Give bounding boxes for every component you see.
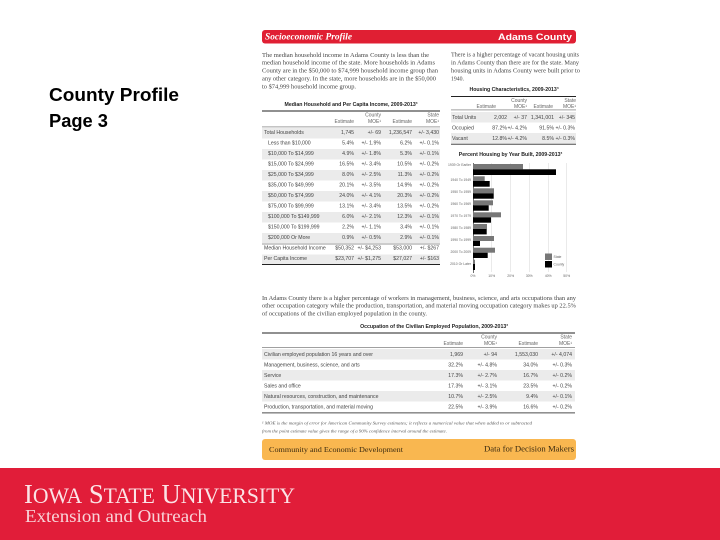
income table: +/- $267 [420, 246, 439, 252]
income table: $100,000 To $149,999 [268, 214, 320, 220]
bar chart: housing by year built: 1940 To 1949 [450, 178, 471, 182]
footnote: ¹ MOE is the margin of error for American Community Survey estimates; it reflects a numerical value that when added to or subtracted [262, 420, 533, 426]
chart legend [545, 254, 565, 268]
bar chart: housing by year built: 30% [526, 274, 533, 278]
occupation paragraph: of occupations of the civilian employed population in the county. [262, 310, 427, 318]
income table: 13.1% [339, 204, 354, 210]
housing characteristics table: +/- 4.2% [508, 126, 527, 132]
income table: 0.9% [342, 235, 354, 241]
housing table title: Housing Characteristics, 2009-2013³ [469, 87, 559, 93]
chart legend: State [554, 255, 562, 259]
income table: +/- 0.1% [420, 224, 439, 230]
slide title: County Profile [49, 85, 179, 105]
bar chart: housing by year built: 1990 To 1999 [450, 238, 471, 242]
income table: +/- 2.5% [362, 172, 381, 178]
occupation table: +/- 0.1% [553, 394, 572, 400]
occupation table: 17.3% [448, 384, 463, 390]
income table: 14.9% [397, 182, 412, 188]
income table: +/- 0.2% [420, 204, 439, 210]
income paragraph: The median household income in Adams County is less than the [262, 52, 429, 59]
occupation table: +/- 2.7% [478, 373, 497, 379]
occupation table: Management, business, science, and arts [264, 362, 360, 368]
occupation table: Natural resources, construction, and maintenance [264, 394, 379, 400]
income paragraph: any other category. In the state, more households are in the $50,000 [262, 76, 437, 82]
income table: 8.0% [342, 172, 354, 178]
income table: +/- $1,275 [357, 256, 381, 262]
bar chart: housing by year built: 40% [545, 274, 552, 278]
income table: 6.2% [400, 140, 412, 146]
income table: $50,000 To $74,999 [268, 193, 314, 199]
bar chart: housing by year built: 1970 To 1979 [450, 214, 471, 218]
footnote: from the point estimate value gives the range of a 90% confidence interval around the estimate. [262, 428, 447, 434]
income table: State [427, 112, 439, 118]
bar chart: housing by year built: 1980 To 1989 [450, 226, 471, 230]
income table: 2.2% [342, 224, 354, 230]
occupation table: 22.5% [448, 404, 463, 410]
occupation table: +/- 3.1% [478, 384, 497, 390]
housing characteristics table: +/- 0.3% [556, 136, 575, 142]
housing characteristics table: State [564, 98, 576, 104]
income paragraph: to $74,999 household income group. [262, 84, 356, 90]
income table: +/- 3.4% [362, 162, 381, 168]
housing characteristics table: MOE¹ [514, 104, 527, 110]
income table: Estimate [393, 119, 412, 125]
income table: 10.5% [397, 162, 412, 168]
income table: 2.9% [400, 235, 412, 241]
housing characteristics table: County [511, 98, 527, 104]
housing characteristics table: +/- 345 [559, 115, 575, 121]
income table: 11.3% [398, 172, 412, 178]
income table: +/- 0.5% [362, 235, 381, 241]
income table: $150,000 To $199,999 [268, 224, 320, 230]
occupation table: MOE¹ [484, 341, 497, 347]
occupation table: +/- 94 [484, 352, 497, 358]
housing characteristics table: Occupied [452, 126, 474, 132]
income paragraph: County are in the $50,000 to $74,999 household income group than [262, 68, 439, 74]
occupation table: +/- 4.8% [478, 362, 497, 368]
orange footer banner: Data for Decision Makers [484, 444, 574, 454]
income table: 4.9% [342, 151, 354, 157]
slide title [49, 85, 179, 131]
footnote [262, 420, 533, 434]
housing characteristics table: 91.5% [539, 126, 554, 132]
housing characteristics table: 2,002 [494, 115, 507, 121]
income table: 1,236,547 [389, 130, 412, 136]
occupation table: +/- 4,074 [551, 352, 572, 358]
occupation table: +/- 0.2% [553, 373, 572, 379]
income table: $15,000 To $24,999 [268, 162, 314, 168]
income table [262, 102, 440, 265]
housing characteristics table: Estimate [477, 104, 496, 110]
occupation table: +/- 0.3% [553, 362, 572, 368]
income table: +/- 69 [368, 130, 381, 136]
slide title: Page 3 [49, 111, 108, 131]
bar chart: housing by year built: 2010 Or Later [450, 262, 472, 266]
occupation table: State [560, 334, 572, 340]
occupation table: 1,969 [450, 352, 463, 358]
university wordmark: IOWA STATE UNIVERSITY [24, 479, 295, 509]
housing characteristics table: MOE¹ [563, 104, 576, 110]
income table: +/- $4,253 [357, 246, 381, 252]
profile header banner [262, 30, 576, 44]
income table: +/- 0.2% [420, 172, 439, 178]
housing paragraph: There is a higher percentage of vacant housing units [451, 52, 579, 58]
housing characteristics table: Vacant [452, 136, 468, 142]
occupation table: 34.0% [523, 362, 538, 368]
income table: Total Households [264, 130, 304, 136]
income table: +/- 2.1% [362, 214, 381, 220]
occupation table: 23.5% [523, 384, 538, 390]
income table: Estimate [335, 119, 354, 125]
income paragraph [262, 52, 439, 90]
housing characteristics table: Total Units [452, 115, 477, 121]
income table: +/- 1.1% [362, 224, 381, 230]
occupation table: Sales and office [264, 384, 301, 390]
income table: +/- 3.4% [362, 204, 381, 210]
occupation table: 9.4% [526, 394, 538, 400]
income table: 6.0% [342, 214, 354, 220]
income table: Median Household Income [264, 246, 326, 252]
income table: $50,352 [335, 246, 354, 252]
income table: +/- 0.1% [420, 214, 439, 220]
occupation table: 16.7% [523, 373, 538, 379]
income table: +/- 0.2% [420, 162, 439, 168]
income table: MOE¹ [426, 119, 439, 125]
housing paragraph: 1940. [451, 76, 464, 82]
red university footer [0, 468, 720, 540]
income table: 5.4% [342, 140, 354, 146]
housing characteristics table: +/- 37 [514, 115, 527, 121]
occupation table: +/- 0.2% [553, 384, 572, 390]
occupation table: +/- 0.2% [553, 404, 572, 410]
income table: 24.0% [339, 193, 354, 199]
income table: $35,000 To $49,999 [268, 182, 314, 188]
occupation table: Service [264, 373, 281, 379]
income table: 20.3% [397, 193, 412, 199]
income table: 13.5% [397, 204, 412, 210]
income table: $200,000 Or More [268, 235, 310, 241]
income table: +/- 3,430 [418, 130, 439, 136]
housing characteristics table: 12.8% [492, 136, 507, 142]
occupation table: 10.7% [448, 394, 463, 400]
income table: $53,000 [393, 246, 412, 252]
occupation table: +/- 3.9% [478, 404, 497, 410]
bar chart: housing by year built [448, 152, 570, 278]
bar chart: housing by year built: 1960 To 1969 [450, 202, 471, 206]
bar chart: housing by year built: 1939 Or Earlier [448, 163, 472, 167]
income table: $10,000 To $14,999 [268, 151, 314, 157]
income table title: Median Household and Per Capita Income, 2009-2013³ [285, 102, 418, 108]
occupation table title: Occupation of the Civilian Employed Population, 2009-2013³ [360, 324, 508, 330]
profile header banner: Adams County [498, 32, 573, 43]
occupation table: County [481, 334, 497, 340]
bar chart: housing by year built: 10% [488, 274, 495, 278]
occupation table: +/- 2.5% [478, 394, 497, 400]
income table: 12.3% [397, 214, 412, 220]
income table: +/- 0.1% [420, 151, 439, 157]
extension and outreach: Extension and Outreach [25, 506, 207, 526]
income table: +/- 0.2% [420, 182, 439, 188]
housing paragraph: in Adams County than there are for the state. Many [451, 60, 580, 66]
housing paragraph: housing units in Adams County were built prior to [451, 68, 581, 74]
income table: +/- 0.2% [420, 193, 439, 199]
housing characteristics table: +/- 0.3% [556, 126, 575, 132]
housing characteristics table [451, 87, 576, 145]
income table: +/- 3.5% [362, 182, 381, 188]
occupation table: MOE¹ [559, 341, 572, 347]
occupation table: 32.2% [448, 362, 463, 368]
income table: $75,000 To $99,999 [268, 204, 314, 210]
housing characteristics table: +/- 4.2% [508, 136, 527, 142]
income table: +/- 0.1% [420, 235, 439, 241]
income table: Less than $10,000 [268, 140, 311, 146]
chart legend: County [554, 262, 565, 266]
housing characteristics table: 1,341,001 [531, 115, 554, 121]
income table: County [365, 112, 381, 118]
profile header banner: Socioeconomic Profile [265, 32, 352, 42]
income table: 16.5% [339, 162, 354, 168]
bar chart: housing by year built: 1950 To 1959 [450, 190, 471, 194]
orange footer banner [262, 439, 576, 460]
housing paragraph [451, 52, 581, 82]
occupation table: 1,553,030 [515, 352, 538, 358]
income table: 5.3% [400, 151, 412, 157]
income table: +/- 1.8% [362, 151, 381, 157]
chart title: Percent Housing by Year Built, 2009-2013³ [459, 152, 562, 158]
income table: 1,745 [341, 130, 354, 136]
bar chart: housing by year built: 20% [507, 274, 514, 278]
occupation paragraph: other occupation category while the production, transportation, and material moving occupation category makes up 22.5% [262, 302, 576, 310]
income table: 3.4% [400, 224, 412, 230]
income table: $23,707 [335, 256, 354, 262]
occupation table: Estimate [444, 341, 463, 347]
income table: 20.1% [339, 182, 354, 188]
occupation paragraph [262, 295, 577, 318]
occupation table: Production, transportation, and material moving [264, 404, 373, 410]
bar chart: housing by year built: 0% [471, 274, 475, 278]
income table: $25,000 To $34,999 [268, 172, 314, 178]
income table: $27,027 [393, 256, 412, 262]
income table: +/- 0.1% [420, 140, 439, 146]
occupation table: Estimate [519, 341, 538, 347]
income table: +/- 4.1% [362, 193, 381, 199]
housing characteristics table: Estimate [534, 104, 553, 110]
housing characteristics table: 87.2% [492, 126, 507, 132]
income table: +/- $163 [420, 256, 439, 262]
income table: +/- 1.9% [362, 140, 381, 146]
orange footer banner: Community and Economic Development [269, 445, 404, 454]
income table: Per Capita Income [264, 256, 307, 262]
income paragraph: median household income of the state. More households in Adams [262, 60, 435, 66]
income table: MOE¹ [368, 119, 381, 125]
occupation table: 16.6% [523, 404, 538, 410]
occupation table [262, 324, 575, 413]
occupation paragraph: In Adams County there is a higher percentage of workers in management, business, science, and arts occupations than any [262, 295, 577, 302]
housing characteristics table: 8.5% [542, 136, 554, 142]
bar chart: housing by year built: 50% [563, 274, 570, 278]
occupation table: 17.3% [448, 373, 463, 379]
bar chart: housing by year built: 2000 To 2009 [450, 250, 471, 254]
occupation table: Civilian employed population 16 years and over [264, 352, 373, 358]
